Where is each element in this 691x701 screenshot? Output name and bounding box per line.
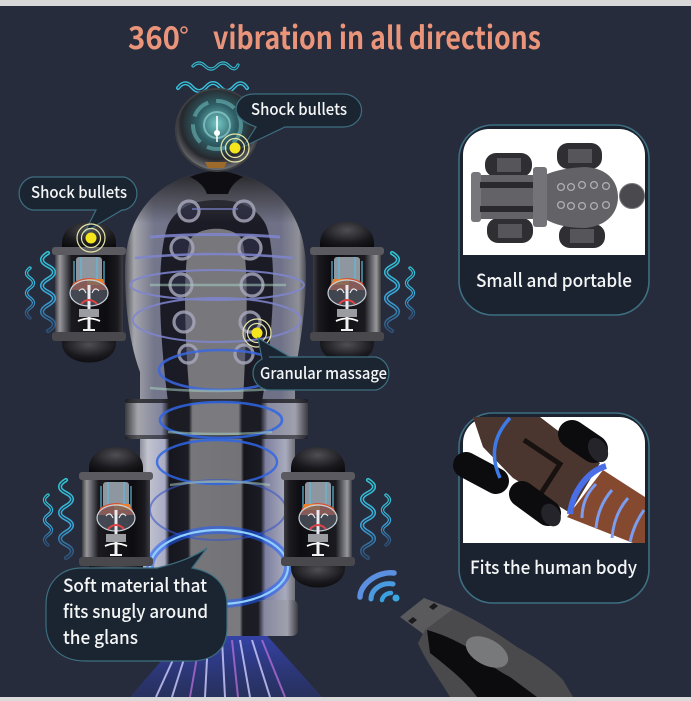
marker: left bullet bbox=[77, 224, 105, 252]
product thumbnail bbox=[471, 143, 644, 248]
product thumbnail bbox=[466, 417, 645, 543]
ball: top vibration unit bbox=[176, 89, 258, 171]
pods: lower right motor bbox=[281, 447, 355, 588]
panel: fits the human body: Fits the human body bbox=[470, 554, 637, 580]
vibration waves: upper right bbox=[386, 253, 414, 331]
callout: soft material: fits snugly around bbox=[63, 598, 208, 624]
pods: lower left motor bbox=[79, 447, 153, 588]
inner dark arch bbox=[160, 200, 273, 402]
callout: shock bullets top: Shock bullets bbox=[251, 96, 347, 120]
device body bbox=[125, 171, 308, 636]
vibration rings bbox=[130, 209, 304, 540]
icon: top vibration waves bbox=[178, 63, 247, 91]
main shaft bbox=[140, 436, 295, 602]
bright glow ring at base bbox=[150, 530, 288, 604]
panel: small and portable: Small and portable bbox=[476, 267, 632, 293]
dark neck under ball bbox=[190, 171, 243, 194]
marker: granular massage bbox=[243, 319, 271, 347]
callout: granular massage: Granular massage bbox=[260, 360, 387, 384]
vibration waves: lower left bbox=[44, 480, 72, 558]
remote: USB controller bbox=[400, 598, 573, 697]
vibration waves: lower right bbox=[362, 480, 390, 558]
callout: shock bullets top bbox=[236, 94, 362, 147]
pods: upper right motor bbox=[310, 222, 384, 362]
head dome bbox=[125, 172, 306, 402]
icon: wireless signal bbox=[360, 573, 398, 600]
callout: shock bullets left: Shock bullets bbox=[31, 179, 127, 203]
callout: shock bullets left bbox=[19, 177, 137, 232]
collar ring bbox=[125, 399, 308, 439]
vibration waves: upper left bbox=[26, 253, 54, 331]
head top shading bbox=[125, 172, 306, 300]
title: 360 bbox=[128, 13, 180, 58]
callout: soft material: Soft material that bbox=[63, 572, 208, 598]
massage granules bbox=[170, 201, 263, 363]
callout: soft material bbox=[46, 548, 227, 661]
title: vibration in all directions bbox=[213, 13, 541, 58]
marker: top bullet bbox=[221, 134, 249, 162]
panel: fits the human body bbox=[459, 413, 649, 603]
inner light arch bbox=[185, 229, 247, 402]
callout: granular massage bbox=[253, 338, 389, 390]
callout: soft material: the glans bbox=[63, 624, 138, 650]
top page band bbox=[0, 0, 691, 6]
light beam below device bbox=[130, 630, 322, 697]
bottom ring bbox=[145, 600, 298, 636]
bottom page band bbox=[0, 697, 691, 701]
pods: upper left motor bbox=[52, 222, 126, 362]
panel: small and portable bbox=[459, 125, 649, 315]
